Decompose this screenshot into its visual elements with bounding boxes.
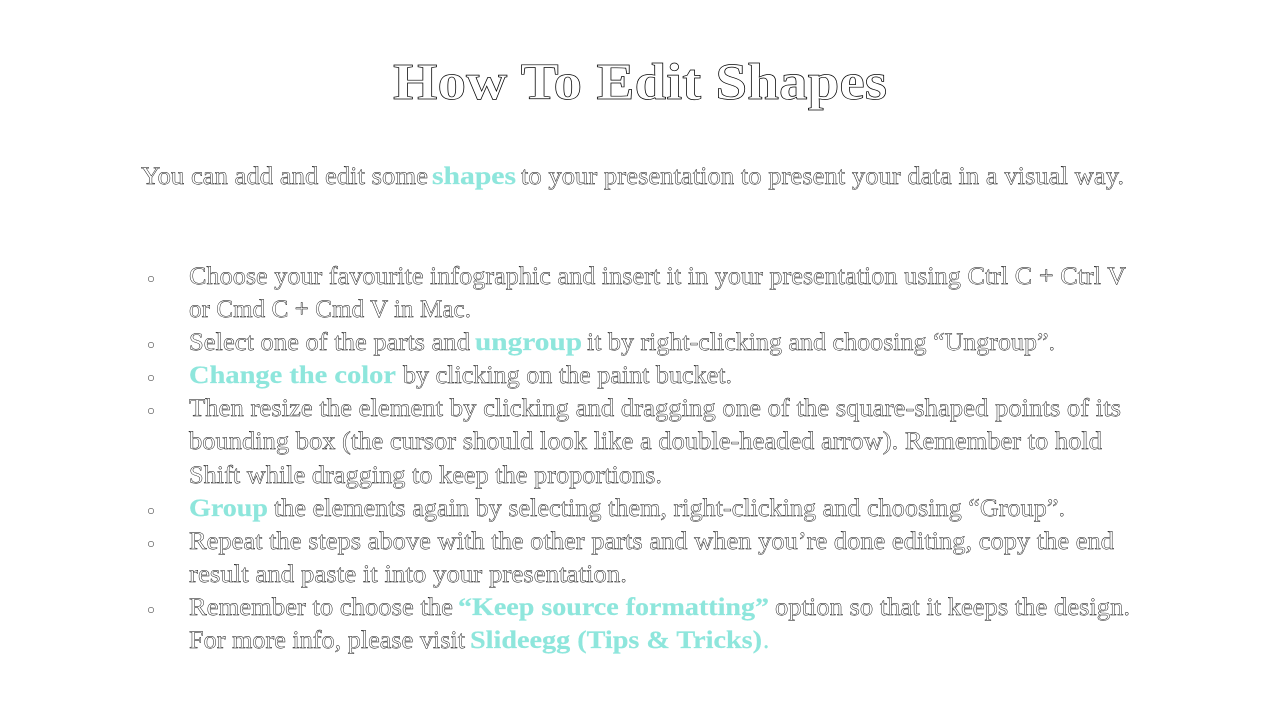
step 1: insert infographic: Choose your favourite infographic and insert it in your presentation using Ctrl C + Ctrl V — [189, 263, 1126, 290]
intro text: to your presentation to present your data in a visual way. — [521, 163, 1124, 190]
step 1: insert infographic: or Cmd C + Cmd V in Mac. — [189, 296, 471, 323]
step 7: keep source formatting — [148, 594, 1130, 654]
step 7: keep source formatting: option so that it keeps the design. — [775, 594, 1130, 621]
step 3: change the color: Change the color — [189, 362, 396, 389]
instruction list — [148, 263, 1130, 654]
step 7: keep source formatting: . — [763, 627, 769, 654]
step 6: repeat — [148, 528, 1115, 588]
intro text: shapes — [432, 163, 516, 190]
intro text: You can add and edit some — [141, 163, 428, 190]
step 4: resize: bounding box (the cursor should look like a double-headed arrow). Remember to hold — [189, 428, 1103, 455]
step 7: keep source formatting: Slideegg (Tips & Tricks) — [470, 627, 762, 654]
step 2: ungroup — [148, 329, 1055, 356]
step 7: keep source formatting: Remember to choose the — [189, 594, 453, 621]
step 4: resize: Shift while dragging to keep the proportions. — [189, 462, 662, 489]
step 5: group: the elements again by selecting them, right-clicking and choosing “Group”. — [274, 495, 1065, 522]
step 4: resize: Then resize the element by clicking and dragging one of the square-shaped points of its — [189, 395, 1121, 422]
title: How To Edit Shapes — [393, 54, 887, 111]
step 7: keep source formatting: “Keep source formatting” — [458, 594, 769, 621]
step 7: keep source formatting: For more info, please visit — [189, 627, 465, 654]
step 5: group: Group — [189, 495, 268, 522]
step 6: repeat: result and paste it into your presentation. — [189, 561, 627, 588]
step 1: insert infographic — [148, 263, 1126, 323]
intro text — [141, 163, 1124, 190]
step 6: repeat: Repeat the steps above with the other parts and when you’re done editing, copy the end — [189, 528, 1115, 555]
step 2: ungroup: it by right-clicking and choosing “Ungroup”. — [587, 329, 1055, 356]
step 3: change the color: by clicking on the paint bucket. — [403, 362, 732, 389]
step 4: resize — [148, 395, 1121, 489]
step 2: ungroup: Select one of the parts and — [189, 329, 471, 356]
step 2: ungroup: ungroup — [475, 329, 582, 356]
step 3: change the color — [148, 362, 732, 389]
